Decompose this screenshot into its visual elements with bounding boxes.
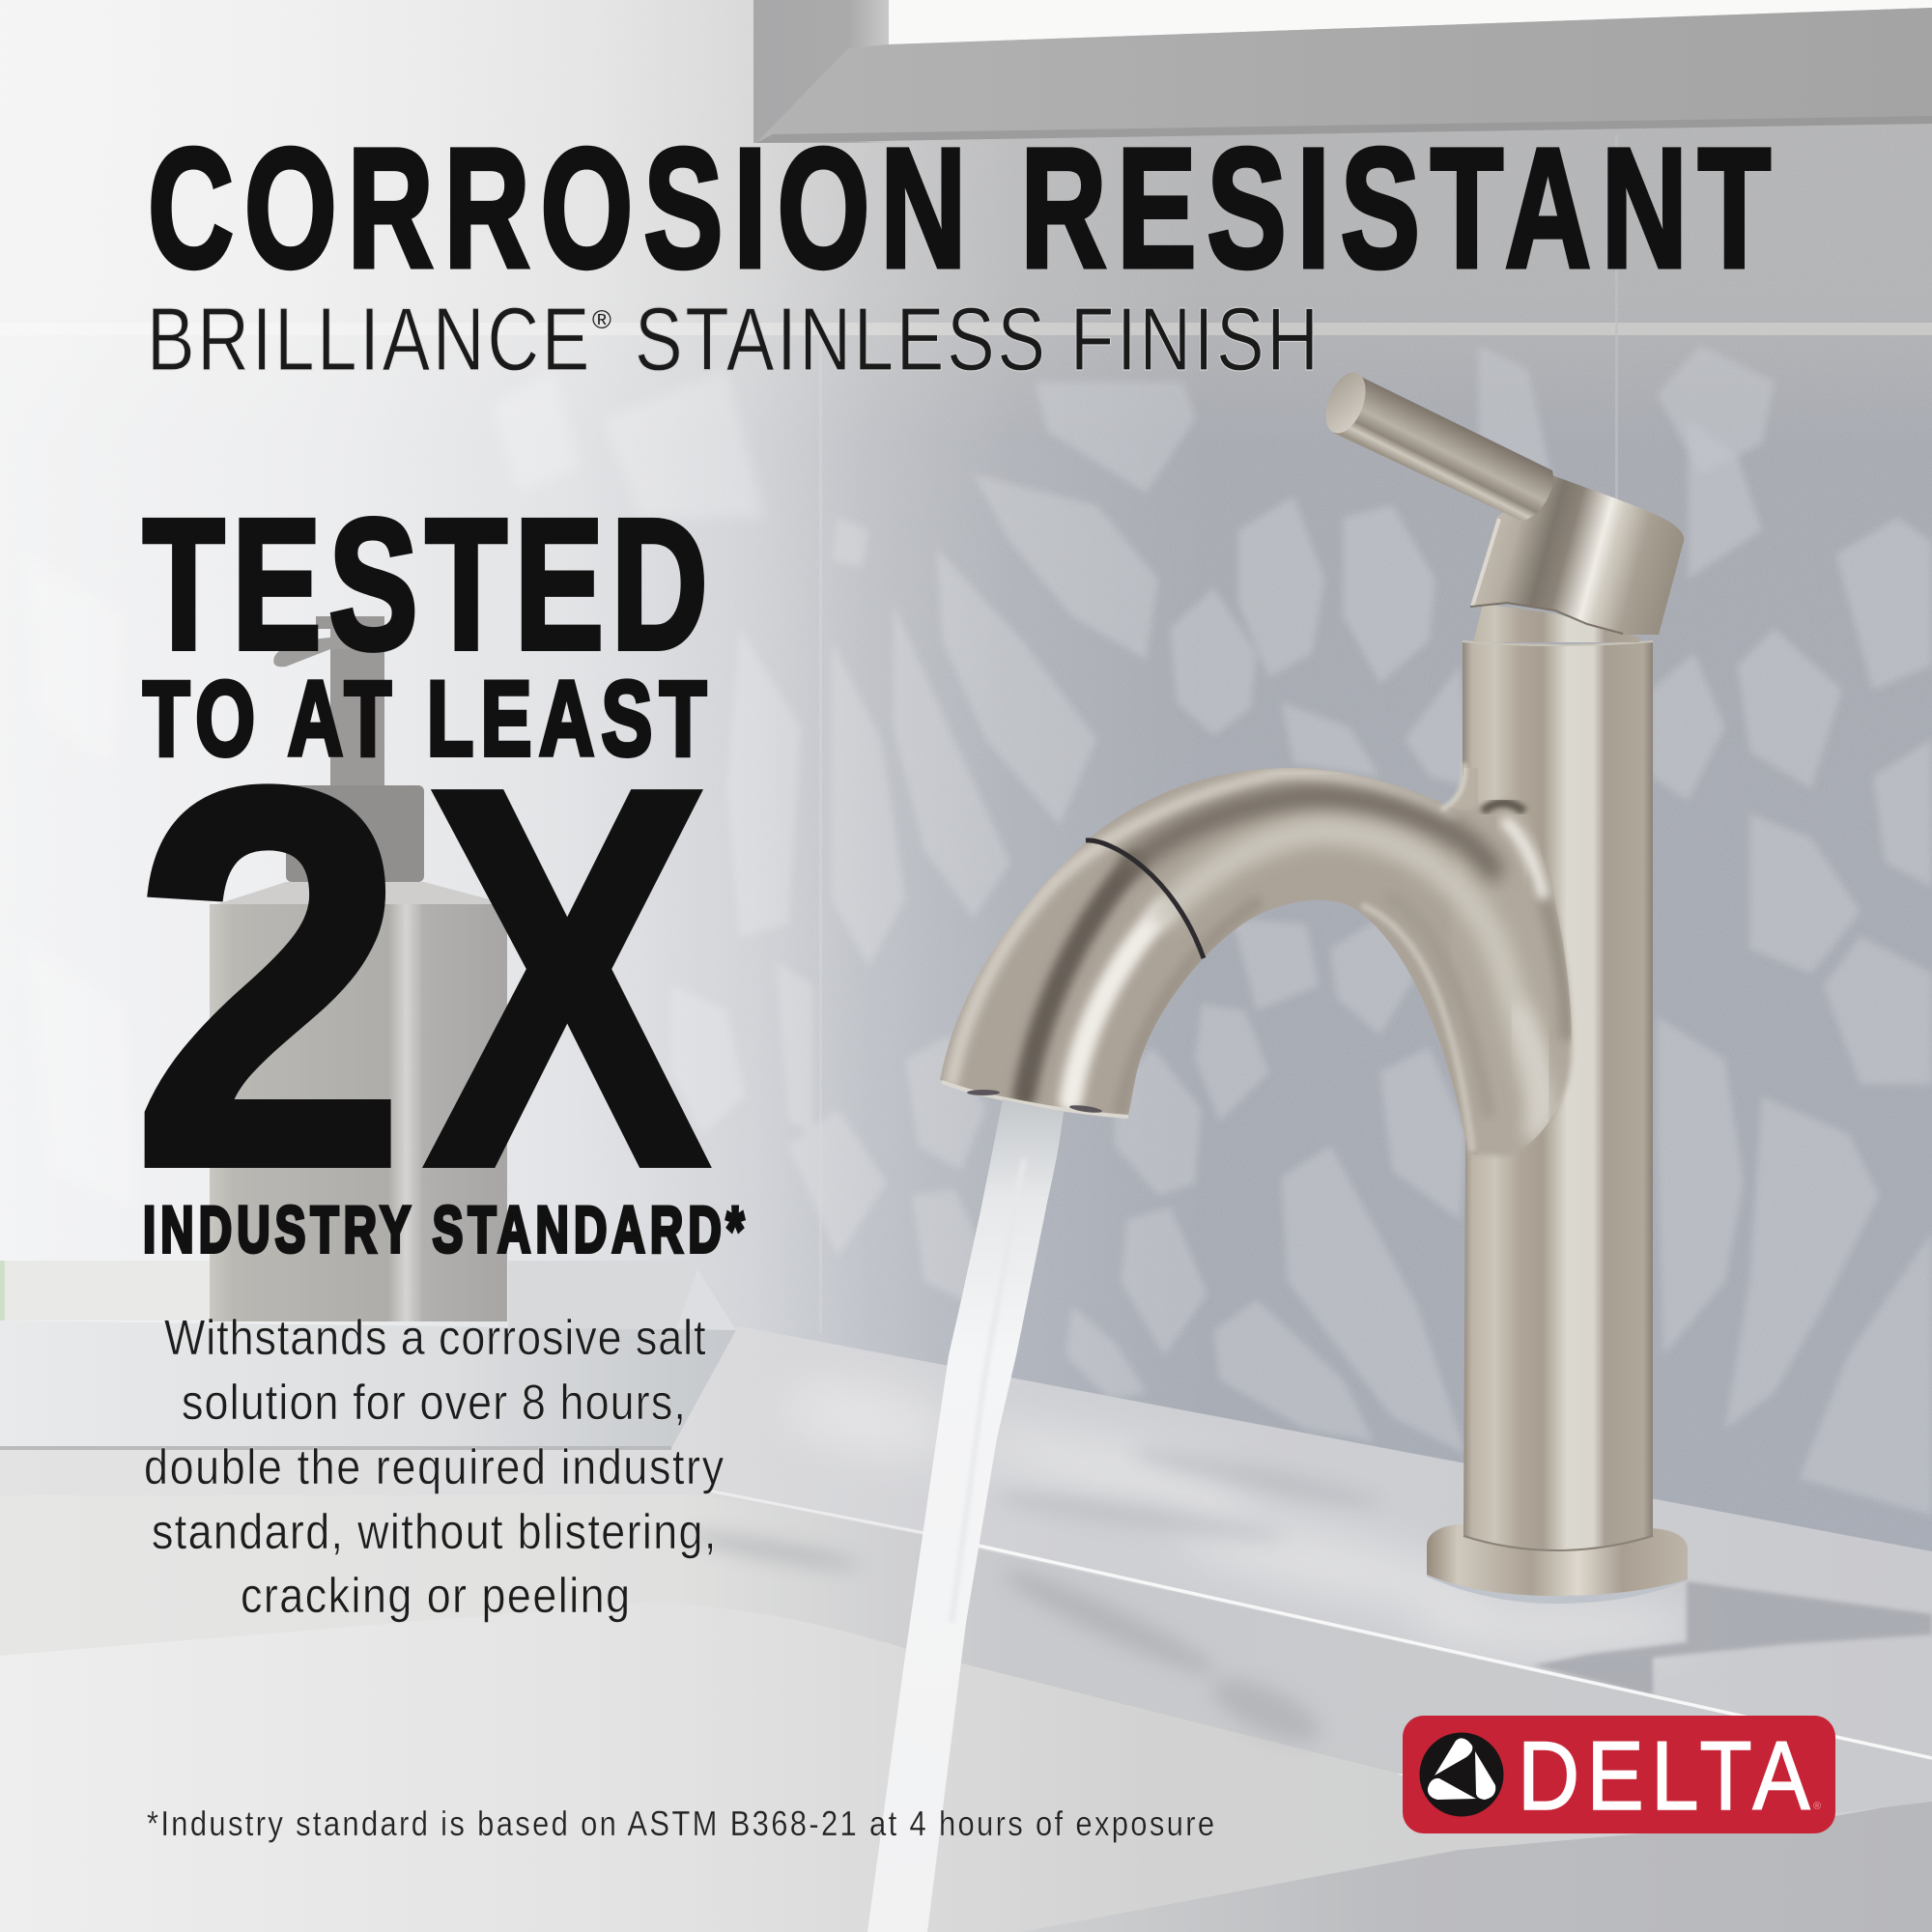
footnote: *Industry standard is based on ASTM B368-21 at 4 hours of exposure <box>147 1805 1214 1844</box>
subtitle: ® <box>592 305 611 334</box>
marble counter front edge <box>0 1491 1932 1813</box>
body text: double the required industry <box>144 1440 724 1495</box>
curved spout <box>940 763 1572 1156</box>
big number 2X <box>131 677 712 1279</box>
water stream <box>867 1099 1064 1932</box>
big number 2X: X <box>424 677 712 1279</box>
mirror frame and glass <box>753 0 1932 143</box>
sink basin <box>0 1603 1932 1932</box>
faucet <box>940 367 1688 1604</box>
logo: Delta: ® <box>1813 1801 1821 1812</box>
dark o-ring on spout <box>1086 840 1204 958</box>
subtitle <box>147 289 1319 389</box>
body text <box>144 1311 724 1624</box>
faucet reflection on counter <box>1533 1581 1932 1695</box>
soap dispenser <box>210 616 507 1321</box>
handle lever <box>1318 367 1553 522</box>
subtitle: BRILLIANCE <box>147 289 589 389</box>
body text: standard, without blistering, <box>152 1505 716 1560</box>
icon: Delta triangle mark <box>1420 1733 1503 1816</box>
faucet column <box>1463 641 1653 1550</box>
body text: Withstands a corrosive salt <box>164 1311 706 1366</box>
logo: Delta: DELTA <box>1518 1722 1810 1831</box>
title: CORROSION RESISTANT <box>148 113 1771 303</box>
handle hub <box>1470 475 1684 635</box>
headline: industry standard: INDUSTRY STANDARD* <box>143 1194 744 1266</box>
faucet base plate <box>1427 1524 1688 1604</box>
headline: to at least: TO AT LEAST <box>143 660 706 779</box>
big number 2X: 2 <box>131 677 408 1279</box>
logo: Delta <box>1403 1716 1835 1833</box>
marble counter top <box>0 1326 1932 1768</box>
body text: cracking or peeling <box>241 1569 630 1624</box>
body text: solution for over 8 hours, <box>182 1376 686 1431</box>
headline: tested: TESTED <box>143 482 708 688</box>
handle stem <box>1473 604 1639 642</box>
subtitle: STAINLESS FINISH <box>635 289 1319 389</box>
soap dish <box>0 1261 736 1450</box>
